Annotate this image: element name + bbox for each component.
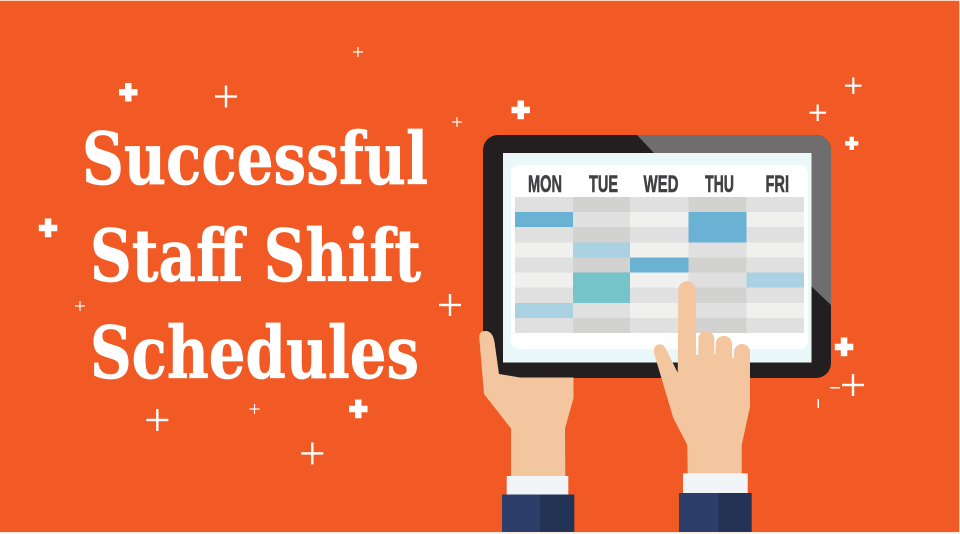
weekday headings — [528, 171, 789, 198]
left sleeve — [502, 494, 540, 532]
right sleeve — [679, 493, 718, 532]
title — [82, 116, 428, 395]
schedule grid — [515, 197, 804, 333]
title: Schedules — [90, 310, 419, 395]
left cuff — [507, 476, 568, 494]
left sleeve shade — [540, 494, 574, 532]
weekday headings: MON — [528, 171, 562, 198]
left hand — [479, 331, 574, 532]
top edge — [0, 0, 960, 1]
tablet — [483, 135, 831, 378]
right hand — [654, 281, 752, 532]
left hand skin — [479, 331, 574, 477]
weekday headings: WED — [644, 171, 678, 198]
right hand skin — [654, 281, 750, 474]
screen — [503, 153, 812, 362]
tablet body — [483, 135, 831, 378]
right cuff — [683, 473, 748, 493]
bottom edge — [0, 532, 960, 534]
weekday headings: THU — [705, 171, 734, 198]
title: Staff Shift — [90, 213, 421, 298]
sparkles — [39, 47, 864, 464]
right edge — [959, 0, 960, 534]
right sleeve shade — [718, 493, 752, 532]
weekday headings: FRI — [766, 171, 789, 198]
weekday headings: TUE — [589, 171, 618, 198]
calendar panel — [511, 165, 808, 349]
tablet glare — [637, 135, 831, 305]
title: Successful — [82, 116, 428, 201]
